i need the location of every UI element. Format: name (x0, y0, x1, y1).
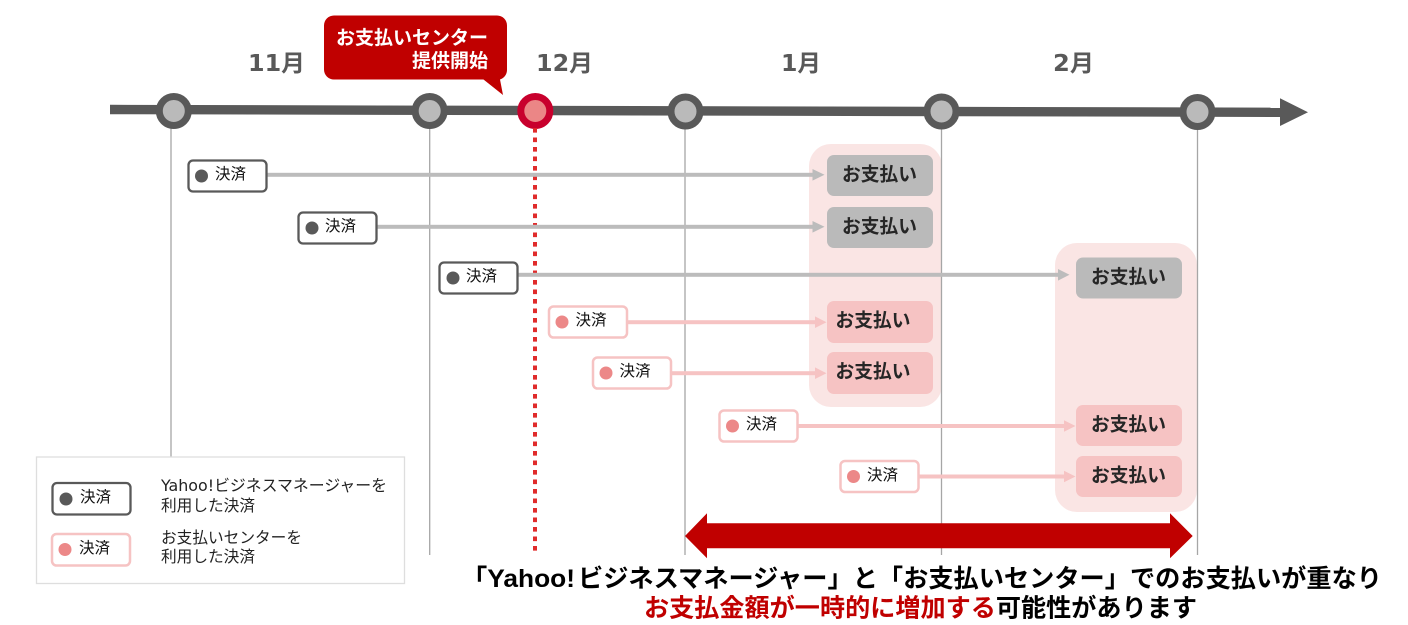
settlement box 3: 決済 (466, 267, 498, 285)
settlement box 2: 決済 (325, 217, 357, 235)
settlement box 5 (593, 358, 671, 388)
payment box 1 (827, 155, 933, 196)
vertical guide lines (171, 125, 1198, 555)
pink arrows: payment center settlements (627, 316, 1076, 482)
legend item: Yahoo business manager: Yahoo!ビジネスマネージャーを (160, 476, 387, 495)
double-headed overlap arrow (685, 513, 1193, 558)
callout: payment center launch (324, 16, 507, 95)
today marker: payment center launch (521, 96, 550, 126)
month labels: 1月 (781, 51, 821, 77)
gray arrows: Yahoo business manager settlements (267, 169, 1070, 281)
legend item: Yahoo business manager (52, 476, 387, 515)
payment box 7 (1076, 456, 1182, 497)
legend item: Yahoo business manager: 利用した決済 (161, 497, 255, 515)
settlement box 2 (298, 212, 376, 244)
callout: payment center launch: お支払いセンター (336, 27, 488, 49)
payment box 7: お支払い (1091, 464, 1166, 486)
timeline arrow (110, 98, 1308, 126)
month labels (248, 51, 1094, 77)
payment box 6: お支払い (1091, 414, 1166, 436)
month labels: 2月 (1053, 51, 1094, 77)
payment box 4: お支払い (836, 310, 910, 332)
timeline markers (159, 96, 1212, 126)
conclusion text line 1: 「Yahoo! (461, 565, 575, 593)
legend (36, 457, 404, 584)
payment box 2: お支払い (842, 216, 917, 238)
settlement box 7: 決済 (867, 466, 899, 484)
legend item: payment center: 決済 (79, 539, 111, 557)
settlement box 4: 決済 (576, 311, 607, 329)
settlement box 5: 決済 (620, 362, 651, 380)
payment box 1: お支払い (842, 164, 917, 186)
settlement box 6: 決済 (746, 415, 778, 433)
payment box 5 (827, 352, 933, 394)
month labels: 11月 (248, 51, 305, 77)
red dotted launch line (533, 128, 537, 555)
payment box 3: お支払い (1091, 266, 1166, 288)
payment box 4 (827, 301, 933, 343)
legend item: payment center (52, 529, 302, 566)
conclusion text line 1: ビジネスマネージャー」と「お支払いセンター」でのお支払いが重なり (578, 564, 1382, 593)
payment box 6 (1076, 405, 1182, 446)
settlement box 6 (720, 410, 798, 442)
panel: February payment period highlight (1055, 243, 1197, 512)
legend item: payment center: お支払いセンターを (161, 529, 302, 547)
payment box 2 (827, 207, 933, 248)
payment box 5: お支払い (836, 360, 910, 382)
settlement box 3 (440, 262, 518, 294)
panel: January payment period highlight (809, 144, 942, 407)
conclusion text line 2: お支払金額が一時的に増加する可能性があります (644, 594, 1197, 622)
settlement box 1: 決済 (215, 165, 247, 183)
legend item: payment center: 利用した決済 (161, 548, 255, 566)
payment box 3 (1076, 258, 1182, 298)
settlement box 4 (549, 306, 627, 338)
legend item: Yahoo business manager: 決済 (80, 488, 112, 506)
settlement box 1 (188, 160, 266, 192)
callout: payment center launch: 提供開始 (412, 50, 488, 72)
month labels: 12月 (536, 51, 593, 77)
settlement box 7 (840, 461, 918, 492)
